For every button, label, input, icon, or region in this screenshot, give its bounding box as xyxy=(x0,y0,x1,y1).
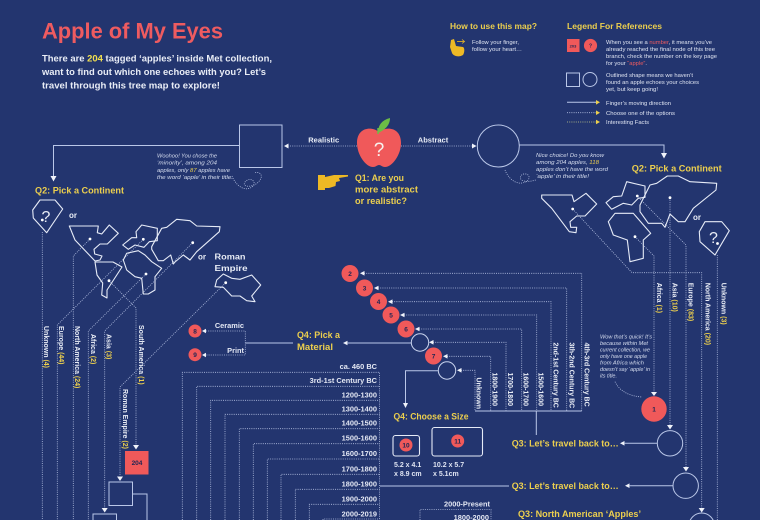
left unknown shape: ? xyxy=(42,209,51,226)
europe timeline labels: 1600-1700 xyxy=(342,449,377,458)
note: africa: because within Met xyxy=(600,341,649,347)
size option 10: x 8.9 cm xyxy=(394,471,422,478)
numbered nodes 2 to 7: 5 xyxy=(389,312,393,320)
note: abstract: ‘apple’ in their title! xyxy=(536,174,590,180)
left world map xyxy=(69,219,220,298)
outlined squares xyxy=(93,482,147,520)
right unknown shape: ? xyxy=(709,230,718,247)
realistic branch: Realistic xyxy=(308,136,339,144)
node 1 xyxy=(641,396,667,422)
north american apples xyxy=(420,500,714,520)
how to use panel: follow your heart… xyxy=(472,47,522,53)
europe timeline tree xyxy=(182,372,380,520)
right unknown shape xyxy=(699,222,729,255)
abstract timeline labels: 1700-1800 xyxy=(506,372,513,406)
how to use panel xyxy=(450,21,537,56)
abstract timeline labels: 2nd-1st Century BC xyxy=(552,342,558,408)
abstract timeline labels xyxy=(474,342,589,435)
intro text: travel through this tree map to explore! xyxy=(42,80,220,92)
realistic branch xyxy=(50,125,357,182)
abstract branch: Abstract xyxy=(418,136,449,144)
note: africa: doesn’t say ‘apple’ in xyxy=(600,367,650,373)
abstract timeline labels: 1500-1600 xyxy=(536,372,543,406)
europe timeline labels: 1300-1400 xyxy=(342,404,377,414)
left rotated labels: Unknown (4) xyxy=(42,326,49,368)
q3 europe branch xyxy=(380,473,698,498)
legend panel: yet, but keep going! xyxy=(606,87,659,93)
icon: apple question: ? xyxy=(374,140,384,161)
abstract timeline labels: 4th-3rd Century BC xyxy=(582,342,589,407)
legend panel: When you see a number, it means you’ve xyxy=(606,40,712,46)
left rotated labels: North America (24) xyxy=(73,326,80,388)
legend panel: Interesting Facts xyxy=(606,120,649,126)
legend panel xyxy=(566,21,717,126)
question 4 material xyxy=(297,330,341,353)
abstract timeline labels: 3th-2nd Century BC xyxy=(567,342,574,408)
q3 asia branch xyxy=(512,431,683,456)
icon: apple question xyxy=(357,118,401,167)
europe timeline labels xyxy=(310,362,378,519)
europe timeline labels: 3rd-1st Century BC xyxy=(310,376,378,385)
timeline branches abstract xyxy=(360,271,582,411)
size option 11: 11 xyxy=(454,438,462,445)
material branch: 9 xyxy=(193,352,197,359)
legend panel: Outlined shape means we haven’t xyxy=(606,73,693,79)
europe timeline labels: 1500-1600 xyxy=(342,434,377,443)
left rotated labels: Asia (3) xyxy=(104,334,112,359)
or label: or xyxy=(69,211,77,220)
europe timeline labels: ca. 460 BC xyxy=(340,362,378,371)
or label right: or xyxy=(693,213,701,222)
or roman empire label: Roman xyxy=(214,252,246,262)
note: realistic: Woohoo! You chose the xyxy=(157,154,217,160)
europe timeline labels: 2000-2019 xyxy=(342,510,377,519)
node 1: 1 xyxy=(652,406,656,414)
note: abstract: apples don’t have the word xyxy=(536,167,609,173)
numbered nodes 2 to 7 xyxy=(342,265,456,379)
numbered nodes 2 to 7: 2 xyxy=(348,271,352,278)
left rotated labels: Roman Empire (2) xyxy=(121,389,128,449)
note: abstract: among 204 apples, 118 xyxy=(536,160,599,166)
size option 11 xyxy=(432,428,482,478)
note: realistic xyxy=(157,154,261,189)
note: africa: its title. xyxy=(600,374,617,380)
numbered nodes 2 to 7: 3 xyxy=(363,286,367,292)
or roman empire label xyxy=(198,252,248,273)
q3 asia branch: Q3: Let’s travel back to… xyxy=(512,438,619,450)
size option 11: x 5.1cm xyxy=(433,471,459,478)
left rotated labels: South America (1) xyxy=(137,325,144,385)
left question 2: Q2: Pick a Continent xyxy=(35,186,125,196)
right dotted branches xyxy=(573,196,717,520)
size option 11: 10.2 x 5.7 xyxy=(433,462,464,469)
note: africa: from Africa which xyxy=(600,360,644,366)
question 4 material: Q4: Pick a xyxy=(297,330,341,341)
left unknown shape xyxy=(33,200,63,233)
note: abstract: Nice choice! Do you know xyxy=(536,153,605,159)
legend panel: Finger’s moving direction xyxy=(606,101,671,107)
legend panel: Choose one of the options xyxy=(606,111,675,117)
left dotted branches xyxy=(42,232,226,520)
europe timeline labels: 1800-1900 xyxy=(342,479,377,488)
right rotated labels xyxy=(655,283,727,345)
icon: pointing hand xyxy=(318,175,348,190)
numbered nodes 2 to 7: 4 xyxy=(377,299,381,306)
material branch xyxy=(188,321,293,361)
size option 10 xyxy=(393,436,422,478)
legend panel: for your “apple”. xyxy=(606,61,647,67)
intro text: want to find out which one echoes with you? Let’s xyxy=(41,67,266,78)
europe timeline labels: 1200-1300 xyxy=(342,390,377,399)
size option 10: 5.2 x 4.1 xyxy=(394,462,421,469)
q3 europe branch: Q3: Let’s travel back to… xyxy=(512,481,619,492)
size branch: Q4: Choose a Size xyxy=(394,412,468,422)
north american apples: 2000-Present xyxy=(444,500,491,508)
legend panel: Legend For References xyxy=(567,21,662,31)
note: africa: current collection, we xyxy=(600,348,650,354)
right rotated labels: Asia (10) xyxy=(671,283,678,312)
left rotated labels: Europe (44) xyxy=(57,326,64,365)
right world map xyxy=(542,176,717,262)
node 204: 204 xyxy=(132,460,143,467)
note: africa xyxy=(600,334,652,397)
question 1: or realistic? xyxy=(355,196,407,207)
abstract timeline labels: 1600-1700 xyxy=(522,372,528,406)
material branch: Ceramic xyxy=(215,321,244,330)
europe timeline labels: 1400-1500 xyxy=(342,419,377,428)
question 1 xyxy=(355,173,419,207)
or roman empire label: Empire xyxy=(214,264,248,273)
europe timeline labels: 1900-2000 xyxy=(342,494,377,504)
numbered nodes 2 to 7: 7 xyxy=(432,354,436,360)
note: realistic: ‘minority’, among 204 xyxy=(157,160,217,166)
size option 10: 10 xyxy=(402,442,410,449)
question 4 material: Material xyxy=(297,342,333,353)
material branch: 8 xyxy=(193,328,197,335)
abstract timeline labels: 1800-1900 xyxy=(490,372,498,406)
note: realistic: apples, only 87 apples have xyxy=(157,168,230,174)
intro text: There are 204 tagged ‘apples’ inside Met collection, xyxy=(42,54,272,64)
size branch xyxy=(394,371,468,422)
legend panel: already reached the final node of this tree xyxy=(606,47,715,53)
intro text xyxy=(41,54,272,92)
numbered nodes 2 to 7: 6 xyxy=(404,326,408,334)
north american apples: Q3: North American ‘Apples’ xyxy=(518,509,641,520)
title: Apple of My Eyes xyxy=(42,18,223,44)
right rotated labels: North America (20) xyxy=(703,283,710,345)
left rotated labels xyxy=(42,325,144,449)
abstract branch xyxy=(401,125,667,167)
note: africa: Wow that’s quick! It’s xyxy=(600,334,652,340)
material branch: Print xyxy=(227,346,245,355)
icon: finger hand xyxy=(450,39,464,56)
abstract timeline labels: Unknown xyxy=(474,378,482,409)
node 204 xyxy=(125,451,148,474)
legend panel: found an apple echoes your choices xyxy=(606,80,699,86)
left rotated labels: Africa (2) xyxy=(89,334,96,364)
or roman empire label: or xyxy=(198,252,206,262)
legend panel: ? xyxy=(589,44,592,50)
note: realistic: the word ‘apple’ in their title. xyxy=(157,175,233,181)
map: roman empire xyxy=(215,274,261,302)
question 1: Q1: Are you xyxy=(355,173,404,184)
legend panel: branch, check the number on the key page xyxy=(606,54,717,60)
arrow to material xyxy=(343,341,411,345)
how to use panel: How to use this map? xyxy=(450,21,537,31)
right question 2: Q2: Pick a Continent xyxy=(632,164,722,174)
question 1: more abstract xyxy=(355,184,419,196)
right rotated labels: Unknown (3) xyxy=(720,283,727,325)
right rotated labels: Africa (1) xyxy=(655,283,662,313)
note: abstract xyxy=(505,153,609,183)
europe timeline labels: 1700-1800 xyxy=(342,464,377,473)
note: africa: only have one apple xyxy=(600,354,647,360)
legend panel: 203 xyxy=(570,44,577,48)
right rotated labels: Europe (83) xyxy=(687,283,694,321)
how to use panel: Follow your finger, xyxy=(472,40,519,46)
